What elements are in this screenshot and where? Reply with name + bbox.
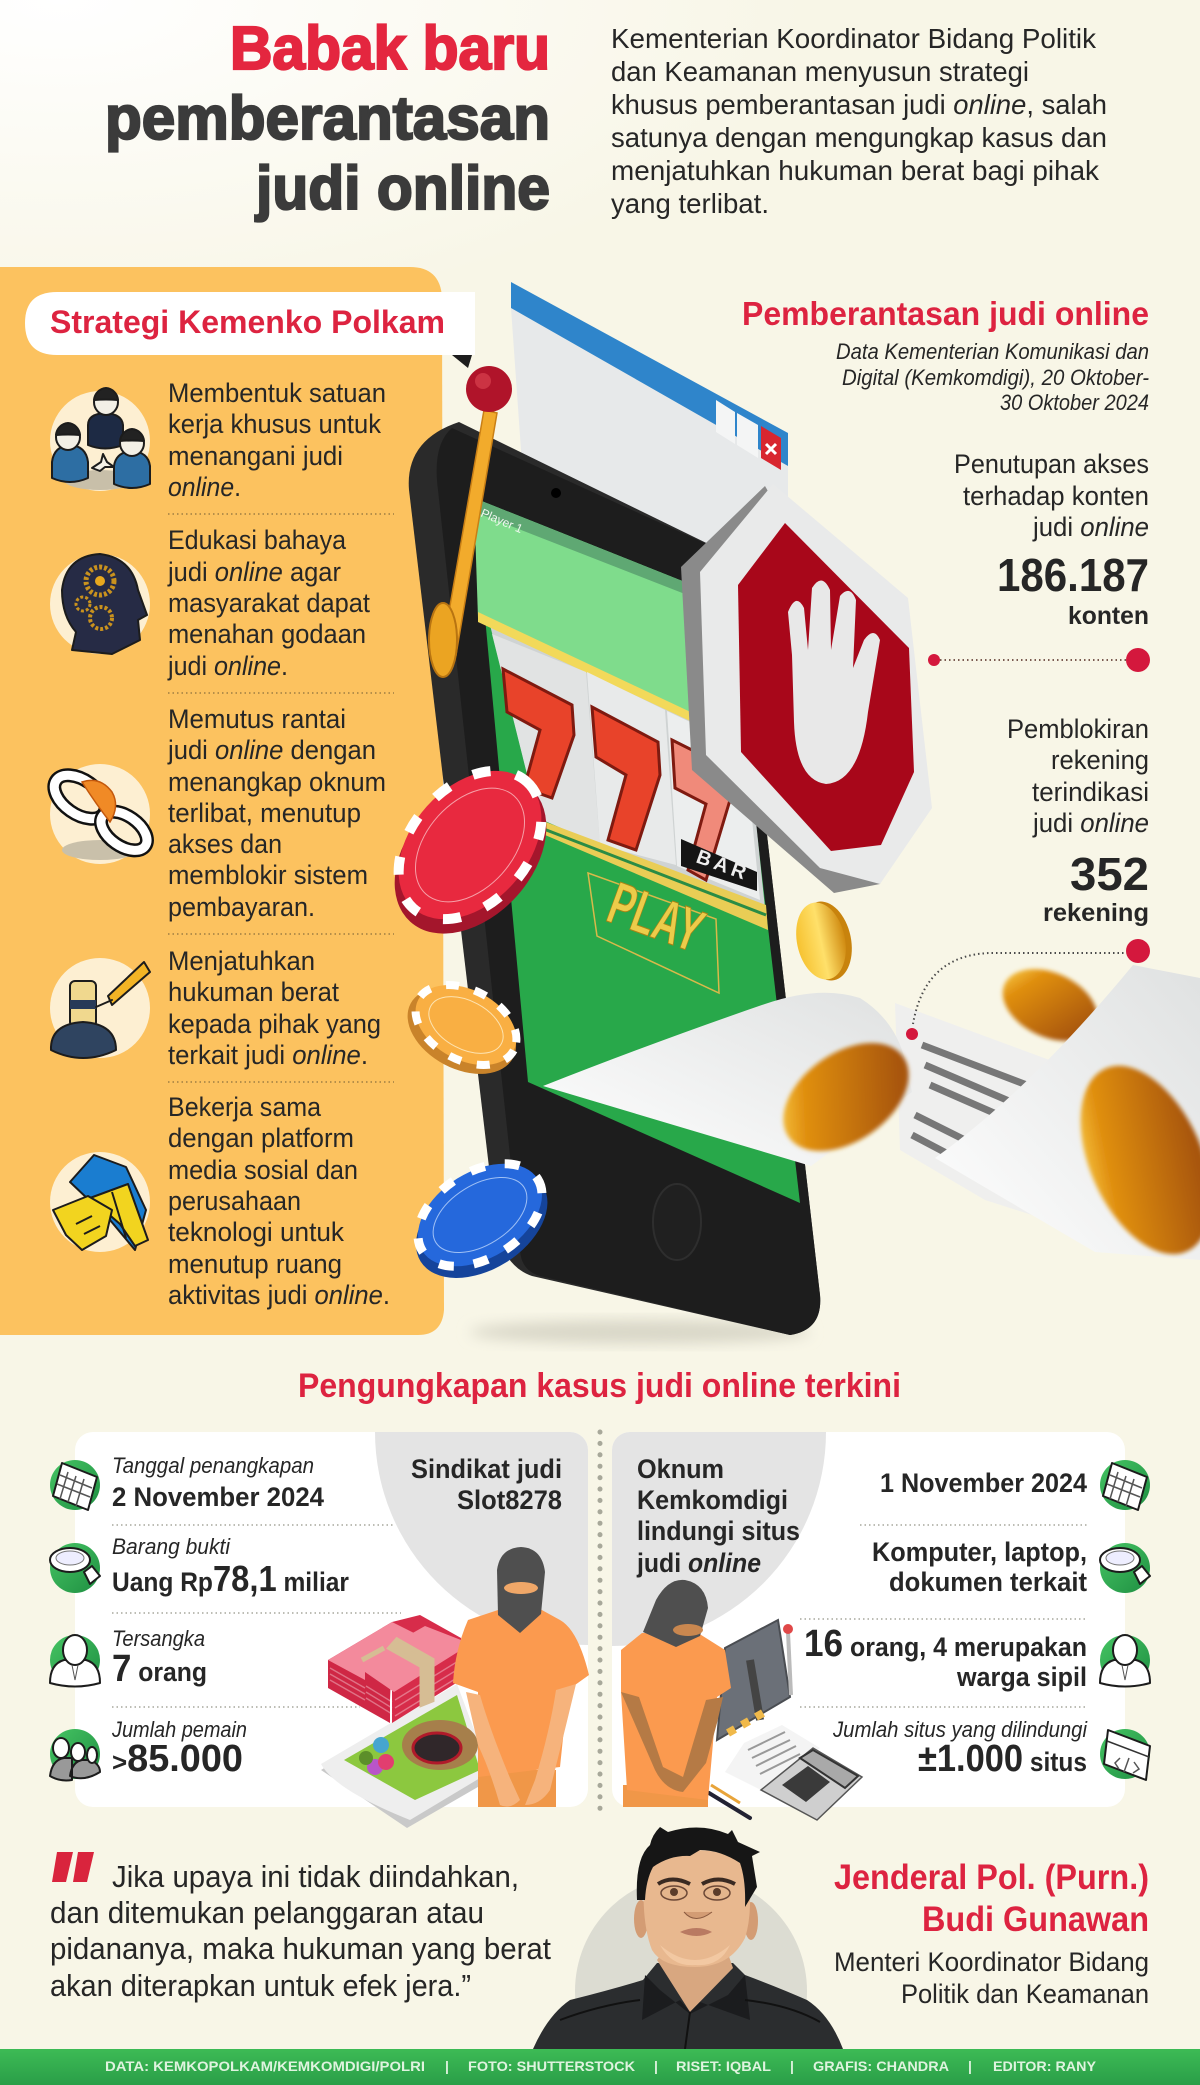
stat: pemblokiran rekening: judi online <box>1032 808 1149 838</box>
panel: strategi <box>0 267 475 1335</box>
phone illustration: Player 1 <box>479 506 525 536</box>
pemberantasan stats heading: 30 Oktober 2024 <box>1000 390 1149 415</box>
footer credits: | <box>445 2058 449 2074</box>
pemberantasan stats heading <box>742 295 1149 415</box>
item 5 text: menutup ruang <box>168 1249 342 1279</box>
text: sindikat title <box>411 1454 562 1515</box>
quote: Jika upaya ini tidak diindahkan, <box>112 1859 519 1894</box>
footer credits: RISET: IQBAL <box>676 2058 771 2074</box>
footer credits: DATA: KEMKOPOLKAM/KEMKOMDIGI/POLRI <box>105 2058 425 2074</box>
item 3 text: judi online dengan <box>167 735 376 765</box>
icon: suspect left <box>50 1635 100 1686</box>
name and role: Budi Gunawan <box>922 1900 1149 1939</box>
card: sindikat judi <box>49 1432 589 1828</box>
stat: penutupan akses: terhadap konten <box>963 481 1149 511</box>
item 4 text: hukuman berat <box>168 977 340 1007</box>
quote mark <box>52 1852 94 1882</box>
chip: blue <box>394 1142 567 1301</box>
icon: code window right <box>1100 1729 1150 1780</box>
chip: orange <box>393 966 533 1091</box>
row: barang bukti <box>112 1534 349 1599</box>
icon: calendar left <box>50 1460 100 1510</box>
item 1 text: Membentuk satuan <box>168 378 386 408</box>
pemberantasan stats heading: Pemberantasan judi online <box>742 295 1149 332</box>
stat: pemblokiran rekening: rekening <box>1043 899 1149 927</box>
icon: calendar right <box>1100 1460 1150 1510</box>
row: jumlah situs right: ±1.000 situs <box>918 1738 1087 1780</box>
stat: penutupan akses <box>954 449 1149 630</box>
item 2 text: masyarakat dapat <box>168 588 371 618</box>
reels <box>478 612 765 908</box>
phone with roulette <box>321 1684 490 1828</box>
browser window <box>511 282 788 720</box>
item 5 text: teknologi untuk <box>168 1217 345 1247</box>
pemberantasan stats heading: Digital (Kemkomdigi), 20 Oktober- <box>842 365 1149 390</box>
name and role <box>834 1858 1149 2009</box>
name and role: Menteri Koordinator Bidang <box>834 1947 1149 1977</box>
coin blurred center <box>763 1021 929 1173</box>
icon: magnifier right <box>1100 1543 1150 1593</box>
footer credits: | <box>654 2058 658 2074</box>
screen top light band <box>474 498 745 760</box>
footer credits: | <box>790 2058 794 2074</box>
stat: penutupan akses: konten <box>1068 602 1149 630</box>
stat: penutupan akses: 186.187 <box>997 549 1149 601</box>
name and role: Politik dan Keamanan <box>901 1979 1149 2009</box>
quote: dan ditemukan pelanggaran atau <box>50 1895 484 1930</box>
strategi pill heading: Strategi Kemenko Polkam <box>50 304 445 340</box>
phone illustration <box>409 282 1200 1344</box>
item 3 text: menangkap oknum <box>168 767 386 797</box>
coin small <box>789 897 859 985</box>
item 1 text <box>168 378 386 502</box>
item 4 text <box>168 946 381 1070</box>
text: sindikat title: Slot8278 <box>457 1485 562 1515</box>
item 3 text: Memutus rantai <box>168 704 346 734</box>
row: tanggal right: 1 November 2024 <box>880 1468 1087 1498</box>
icon: chain <box>46 764 154 864</box>
connector: rekening <box>906 939 1150 1040</box>
card: oknum kemkomdigi <box>612 1432 1151 1821</box>
footer credits: FOTO: SHUTTERSTOCK <box>468 2058 635 2074</box>
row: barang bukti: Barang bukti <box>112 1534 231 1559</box>
intro paragraph: khusus pemberantasan judi online, salah <box>611 89 1107 120</box>
quote <box>50 1852 551 2003</box>
lever <box>429 366 512 677</box>
footer credits: GRAFIS: CHANDRA <box>813 2058 949 2074</box>
intro paragraph: menjatuhkan hukuman berat bagi pihak <box>611 155 1099 186</box>
icon: team <box>50 388 150 491</box>
item 4 text: terkait judi online. <box>168 1040 368 1070</box>
item 3 text: pembayaran. <box>168 892 315 922</box>
title: pemberantasan <box>105 84 550 152</box>
row: barang bukti: Uang Rp78,1 miliar <box>112 1558 349 1599</box>
prisoner left <box>453 1547 589 1807</box>
item 5 text: aktivitas judi online. <box>168 1280 390 1310</box>
title: Babak baru <box>230 14 550 82</box>
row: tanggal: Tanggal penangkapan <box>112 1453 314 1478</box>
icon: magnifier left <box>50 1543 100 1593</box>
name and role: Jenderal Pol. (Purn.) <box>834 1858 1149 1897</box>
row: tersangka right: warga sipil <box>956 1662 1087 1692</box>
item 2 text <box>167 525 371 681</box>
row: jumlah situs right <box>832 1717 1088 1780</box>
item 4 text: kepada pihak yang <box>168 1009 381 1039</box>
intro paragraph: yang terlibat. <box>611 188 769 219</box>
row: jumlah pemain: Jumlah pemain <box>111 1717 247 1742</box>
intro paragraph <box>611 23 1107 219</box>
row: barang bukti right: dokumen terkait <box>889 1567 1087 1597</box>
row: barang bukti right <box>872 1537 1087 1597</box>
text: oknum title: lindungi situs <box>637 1516 800 1546</box>
portrait <box>533 1827 843 2085</box>
row: tersangka: Tersangka <box>112 1626 205 1651</box>
text: oknum title: Kemkomdigi <box>637 1485 788 1515</box>
icon: suspect right <box>1100 1635 1150 1686</box>
intro paragraph: Kementerian Koordinator Bidang Politik <box>611 23 1096 54</box>
row: tanggal: 2 November 2024 <box>112 1482 324 1512</box>
item 1 text: kerja khusus untuk <box>168 409 382 439</box>
item 5 text: perusahaan <box>168 1186 301 1216</box>
item 3 text: terlibat, menutup <box>168 798 361 828</box>
play box: PLAY <box>600 869 713 965</box>
icon: handshake <box>50 1152 150 1252</box>
phone body <box>409 422 820 1335</box>
stop sign <box>681 484 932 893</box>
title: judi online <box>255 154 550 222</box>
reels: BAR <box>693 846 753 886</box>
title <box>105 14 550 222</box>
item 2 text: Edukasi bahaya <box>168 525 346 555</box>
text: oknum title: judi online <box>636 1548 761 1578</box>
icon: gavel <box>50 958 150 1058</box>
receipt paper back <box>895 1003 1110 1240</box>
item 3 text <box>167 704 386 922</box>
prisoner right <box>621 1580 731 1807</box>
stat: pemblokiran rekening <box>1007 714 1149 927</box>
stat: pemblokiran rekening: Pemblokiran <box>1007 714 1149 744</box>
intro paragraph: satunya dengan mengungkap kasus dan <box>611 122 1107 153</box>
row: tersangka <box>112 1626 207 1690</box>
stat: pemblokiran rekening: terindikasi <box>1032 777 1149 807</box>
paper big right <box>935 965 1200 1260</box>
item 3 text: akses dan <box>168 829 282 859</box>
slot machine monitor <box>717 1620 793 1740</box>
text: sindikat title: Sindikat judi <box>411 1454 562 1484</box>
row: tersangka right <box>804 1623 1087 1692</box>
hand <box>788 580 880 784</box>
item 4 text: Menjatuhkan <box>168 946 315 976</box>
strategi pill heading <box>25 292 475 355</box>
item 5 text: media sosial dan <box>168 1155 358 1185</box>
coin big right <box>1054 1046 1200 1274</box>
row: tersangka right: 16 orang, 4 merupakan <box>804 1623 1087 1665</box>
documents and calculator <box>709 1725 862 1820</box>
connector: konten <box>928 648 1150 672</box>
item 5 text: Bekerja sama <box>168 1092 321 1122</box>
pemberantasan stats heading: Data Kementerian Komunikasi dan <box>836 339 1149 364</box>
footer credits: EDITOR: RANY <box>993 2058 1097 2074</box>
item 1 text: menangani judi <box>168 441 343 471</box>
item 5 text <box>168 1092 390 1310</box>
quote: akan diterapkan untuk efek jera.” <box>50 1968 471 2003</box>
row: barang bukti right: Komputer, laptop, <box>872 1537 1087 1567</box>
text: oknum title <box>636 1454 800 1578</box>
stat: penutupan akses: Penutupan akses <box>954 449 1149 479</box>
quote: pidananya, maka hukuman yang berat <box>50 1931 551 1966</box>
center dotted divider <box>598 1432 602 1810</box>
item 2 text: judi online agar <box>167 557 341 587</box>
screen green main <box>474 498 800 1203</box>
row: jumlah pemain: >85.000 <box>112 1738 243 1780</box>
row: jumlah pemain <box>111 1717 247 1780</box>
stat: pemblokiran rekening: 352 <box>1070 848 1149 900</box>
paper front <box>543 993 912 1166</box>
item 1 text: online. <box>168 472 241 502</box>
item 3 text: memblokir sistem <box>168 860 368 890</box>
money stacks <box>328 1615 461 1723</box>
stat: penutupan akses: judi online <box>1032 512 1149 542</box>
row: jumlah situs right: Jumlah situs yang dilindungi <box>832 1717 1088 1742</box>
play box <box>588 869 719 993</box>
coin top right <box>991 955 1109 1055</box>
footer credits: | <box>968 2058 972 2074</box>
row: tanggal <box>112 1453 324 1512</box>
footer credits <box>0 2049 1200 2085</box>
item 2 text: judi online. <box>167 651 288 681</box>
item 5 text: dengan platform <box>168 1123 354 1153</box>
row: tersangka: 7 orang <box>112 1648 207 1690</box>
heading: pengungkapan: Pengungkapan kasus judi online terkini <box>298 1367 901 1405</box>
icon: players left <box>50 1729 100 1780</box>
intro paragraph: dan Keamanan menyusun strategi <box>611 56 1029 87</box>
chip: red <box>362 743 578 963</box>
item 2 text: menahan godaan <box>168 619 366 649</box>
text: oknum title: Oknum <box>637 1454 724 1484</box>
icon: head gears <box>50 554 150 654</box>
stat: pemblokiran rekening: rekening <box>1051 745 1149 775</box>
